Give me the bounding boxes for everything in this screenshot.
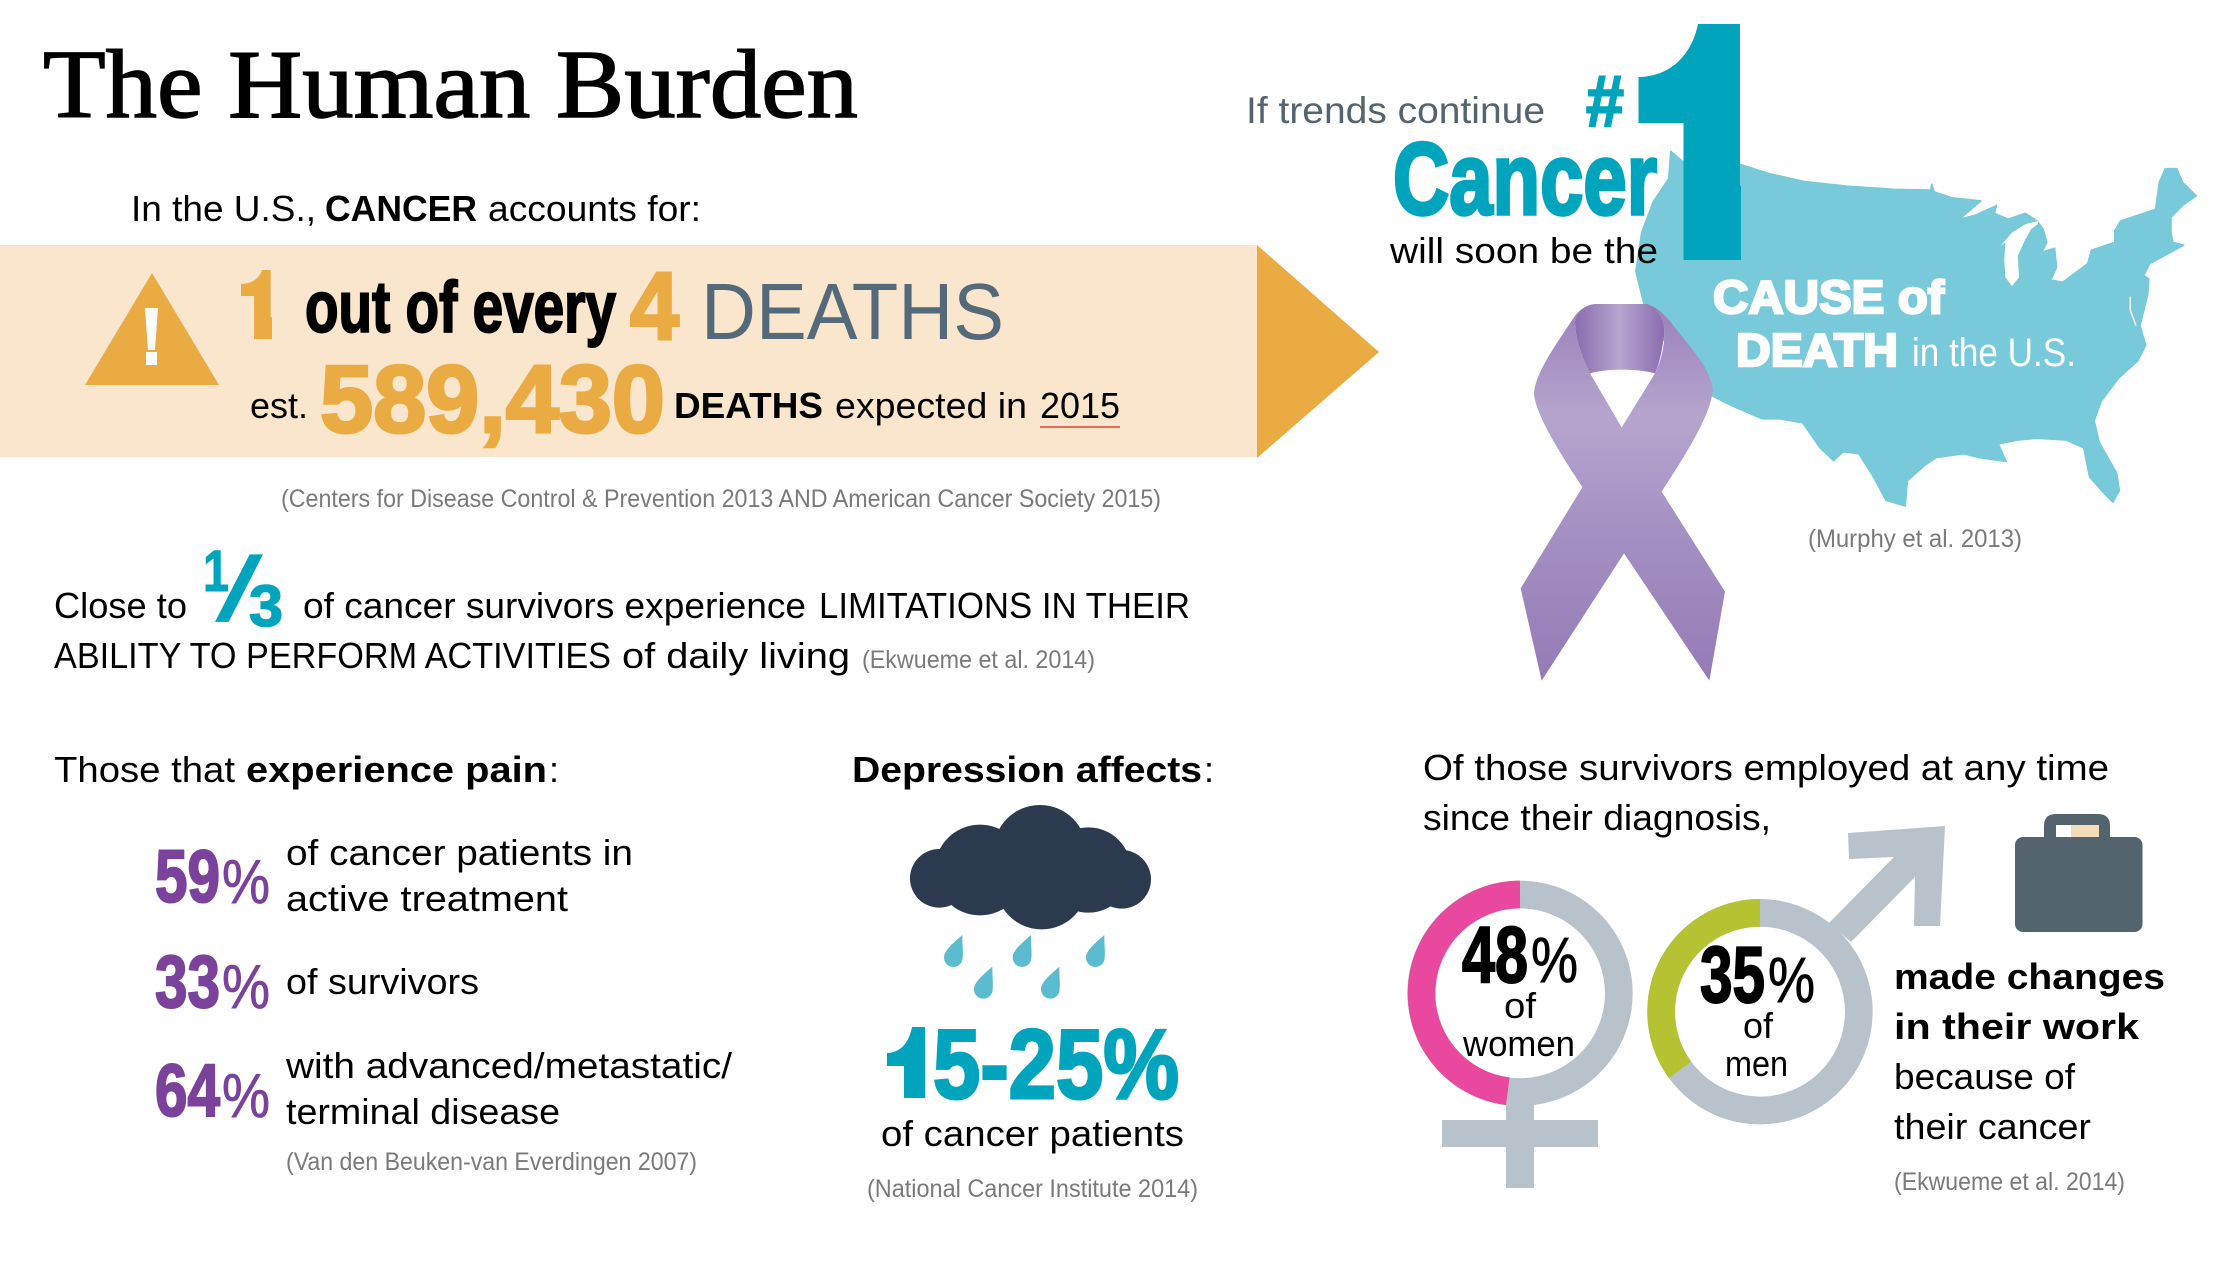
text: one third of survivors: (Ekwueme et al. 2014) (862, 646, 1095, 674)
stat: 33 percent: 33 (155, 940, 220, 1023)
stat: 64 percent: terminal disease (286, 1091, 560, 1132)
map label: cause of death (1713, 271, 2076, 376)
chart: male symbol 35 percent: 35 (1700, 930, 1765, 1019)
chart: male symbol 35 percent (1661, 826, 1945, 1110)
stat: 59 percent: active treatment (286, 878, 568, 919)
stat: 64 percent (155, 1045, 732, 1132)
citation: Ekwueme: (Ekwueme et al. 2014) (1894, 1168, 2125, 1196)
stat: 33 percent: % (222, 953, 270, 1022)
chart: female symbol 48 percent (1421, 894, 1619, 1188)
heading: experience pain (54, 749, 559, 790)
map: United States (1636, 151, 2196, 506)
chart: male symbol 35 percent: of (1743, 1005, 1774, 1046)
heading: experience pain: experience pain (246, 749, 547, 790)
subheading: in the U.S.: accounts for: (488, 188, 701, 229)
icon: briefcase (2015, 814, 2142, 932)
headline: big number one: # (1586, 62, 1624, 142)
panel: employment (1421, 747, 2165, 1196)
heading: experience pain: : (549, 749, 559, 790)
heading: survivors employed: Of those survivors employed at any time (1423, 747, 2109, 788)
stat: 64 percent: 64 (155, 1049, 220, 1132)
stat: 589,430 deaths expected: est. (250, 385, 308, 426)
map label: cause of death: in the U.S. (1912, 331, 2076, 375)
map label: cause of death: DEATH (1736, 324, 1898, 376)
stat: 15-25 percent: 1 (889, 1009, 933, 1119)
text: made changes in their work: in their work (1894, 1006, 2140, 1047)
stat: 64 percent: with advanced/metastatic/ (285, 1045, 732, 1086)
heading: survivors employed: since their diagnosis, (1423, 797, 1771, 838)
icon: rain cloud (910, 805, 1151, 999)
stat: 33 percent: of survivors (286, 961, 479, 1002)
stat: 59 percent: of cancer patients in (286, 832, 633, 873)
stat: 1 out of every 4 deaths: 4 (630, 253, 679, 360)
text: one third of survivors: of daily living (622, 635, 850, 676)
text: one third of survivors: of cancer survivors experience (303, 585, 806, 626)
stat: 1 out of every 4 deaths (241, 270, 1000, 348)
fraction: one third: 3 (249, 574, 283, 639)
text: one third of survivors (54, 539, 1190, 676)
subheading: in the U.S. (131, 188, 701, 229)
headline: cancer: Cancer (1393, 122, 1657, 236)
subheading: in the U.S.: CANCER (325, 188, 477, 229)
chart: female symbol 48 percent: % (1531, 924, 1578, 996)
stat: 59 percent: % (222, 848, 270, 917)
stat: 33 percent (155, 940, 479, 1023)
heading: depression affects: : (1204, 749, 1214, 790)
citation: Van den Beuken: (Van den Beuken-van Everdingen 2007) (286, 1148, 697, 1176)
citation: National Cancer Institute: (National Cancer Institute 2014) (867, 1175, 1198, 1203)
text: one third of survivors: Close to (54, 585, 187, 626)
subheading: in the U.S.: In the U.S., (131, 188, 316, 229)
citation: Murphy: (Murphy et al. 2013) (1808, 525, 2022, 553)
panel: pain (54, 749, 732, 1176)
chart: female symbol 48 percent: 48 (1462, 910, 1528, 999)
headline: if trends continue: If trends continue (1246, 90, 1545, 131)
stat: 589,430 deaths expected: 589,430 (320, 346, 665, 453)
text: will soon be the: will soon be the (1389, 230, 1658, 271)
citation: CDC and ACS: (Centers for Disease Control & Prevention 2013 AND American Cancer Society 2015) (281, 485, 1161, 513)
arrow head (1257, 245, 1379, 458)
heading: experience pain: Those that (54, 749, 235, 790)
stat: 64 percent: % (222, 1062, 270, 1131)
stat: 589,430 deaths expected: 2015 (1040, 385, 1120, 426)
stat: 1 out of every 4 deaths: 1 (243, 253, 274, 360)
stat: 59 percent (155, 832, 633, 919)
stat: 1 out of every 4 deaths: out of every (305, 268, 616, 348)
panel: depression (852, 749, 1214, 1203)
text: one third of survivors: ABILITY TO PERFORM ACTIVITIES (54, 635, 611, 676)
stat: 589,430 deaths expected (250, 346, 1120, 453)
chart: female symbol 48 percent: of (1504, 985, 1537, 1026)
map label: cause of death: CAUSE of (1713, 271, 1945, 323)
chart: male symbol 35 percent: % (1768, 944, 1815, 1016)
text: made changes in their work: made changes (1894, 956, 2165, 997)
text: made changes in their work (1894, 956, 2165, 1147)
stat: 15-25 percent: 5-25% (933, 1009, 1179, 1119)
title: The Human Burden (43, 31, 858, 139)
chart: female symbol 48 percent: women (1462, 1023, 1575, 1064)
fraction: one third: / (215, 539, 264, 641)
heading: depression affects: Depression affects (852, 749, 1202, 790)
text: of cancer patients: of cancer patients (881, 1113, 1184, 1154)
heading: survivors employed (1423, 747, 2109, 838)
headline: big number one (1586, 24, 1741, 260)
icon: purple ribbon (1521, 304, 1725, 681)
fraction: one third (203, 539, 283, 641)
panel: deaths arrow banner (0, 245, 1379, 458)
icon: warning triangle (85, 273, 219, 385)
stat: 589,430 deaths expected: DEATHS (674, 385, 823, 426)
text: one third of survivors: LIMITATIONS IN THEIR (819, 585, 1190, 626)
stat: 1 out of every 4 deaths: DEATHS (701, 267, 1004, 356)
fraction: one third: 1 (203, 539, 229, 604)
stat: 59 percent: 59 (155, 835, 220, 918)
text: made changes in their work: because of (1894, 1056, 2076, 1097)
stat: 589,430 deaths expected: expected in (835, 385, 1027, 426)
stat: 15-25 percent (887, 1027, 1178, 1100)
text: made changes in their work: their cancer (1894, 1106, 2091, 1147)
chart: male symbol 35 percent: men (1725, 1043, 1788, 1084)
